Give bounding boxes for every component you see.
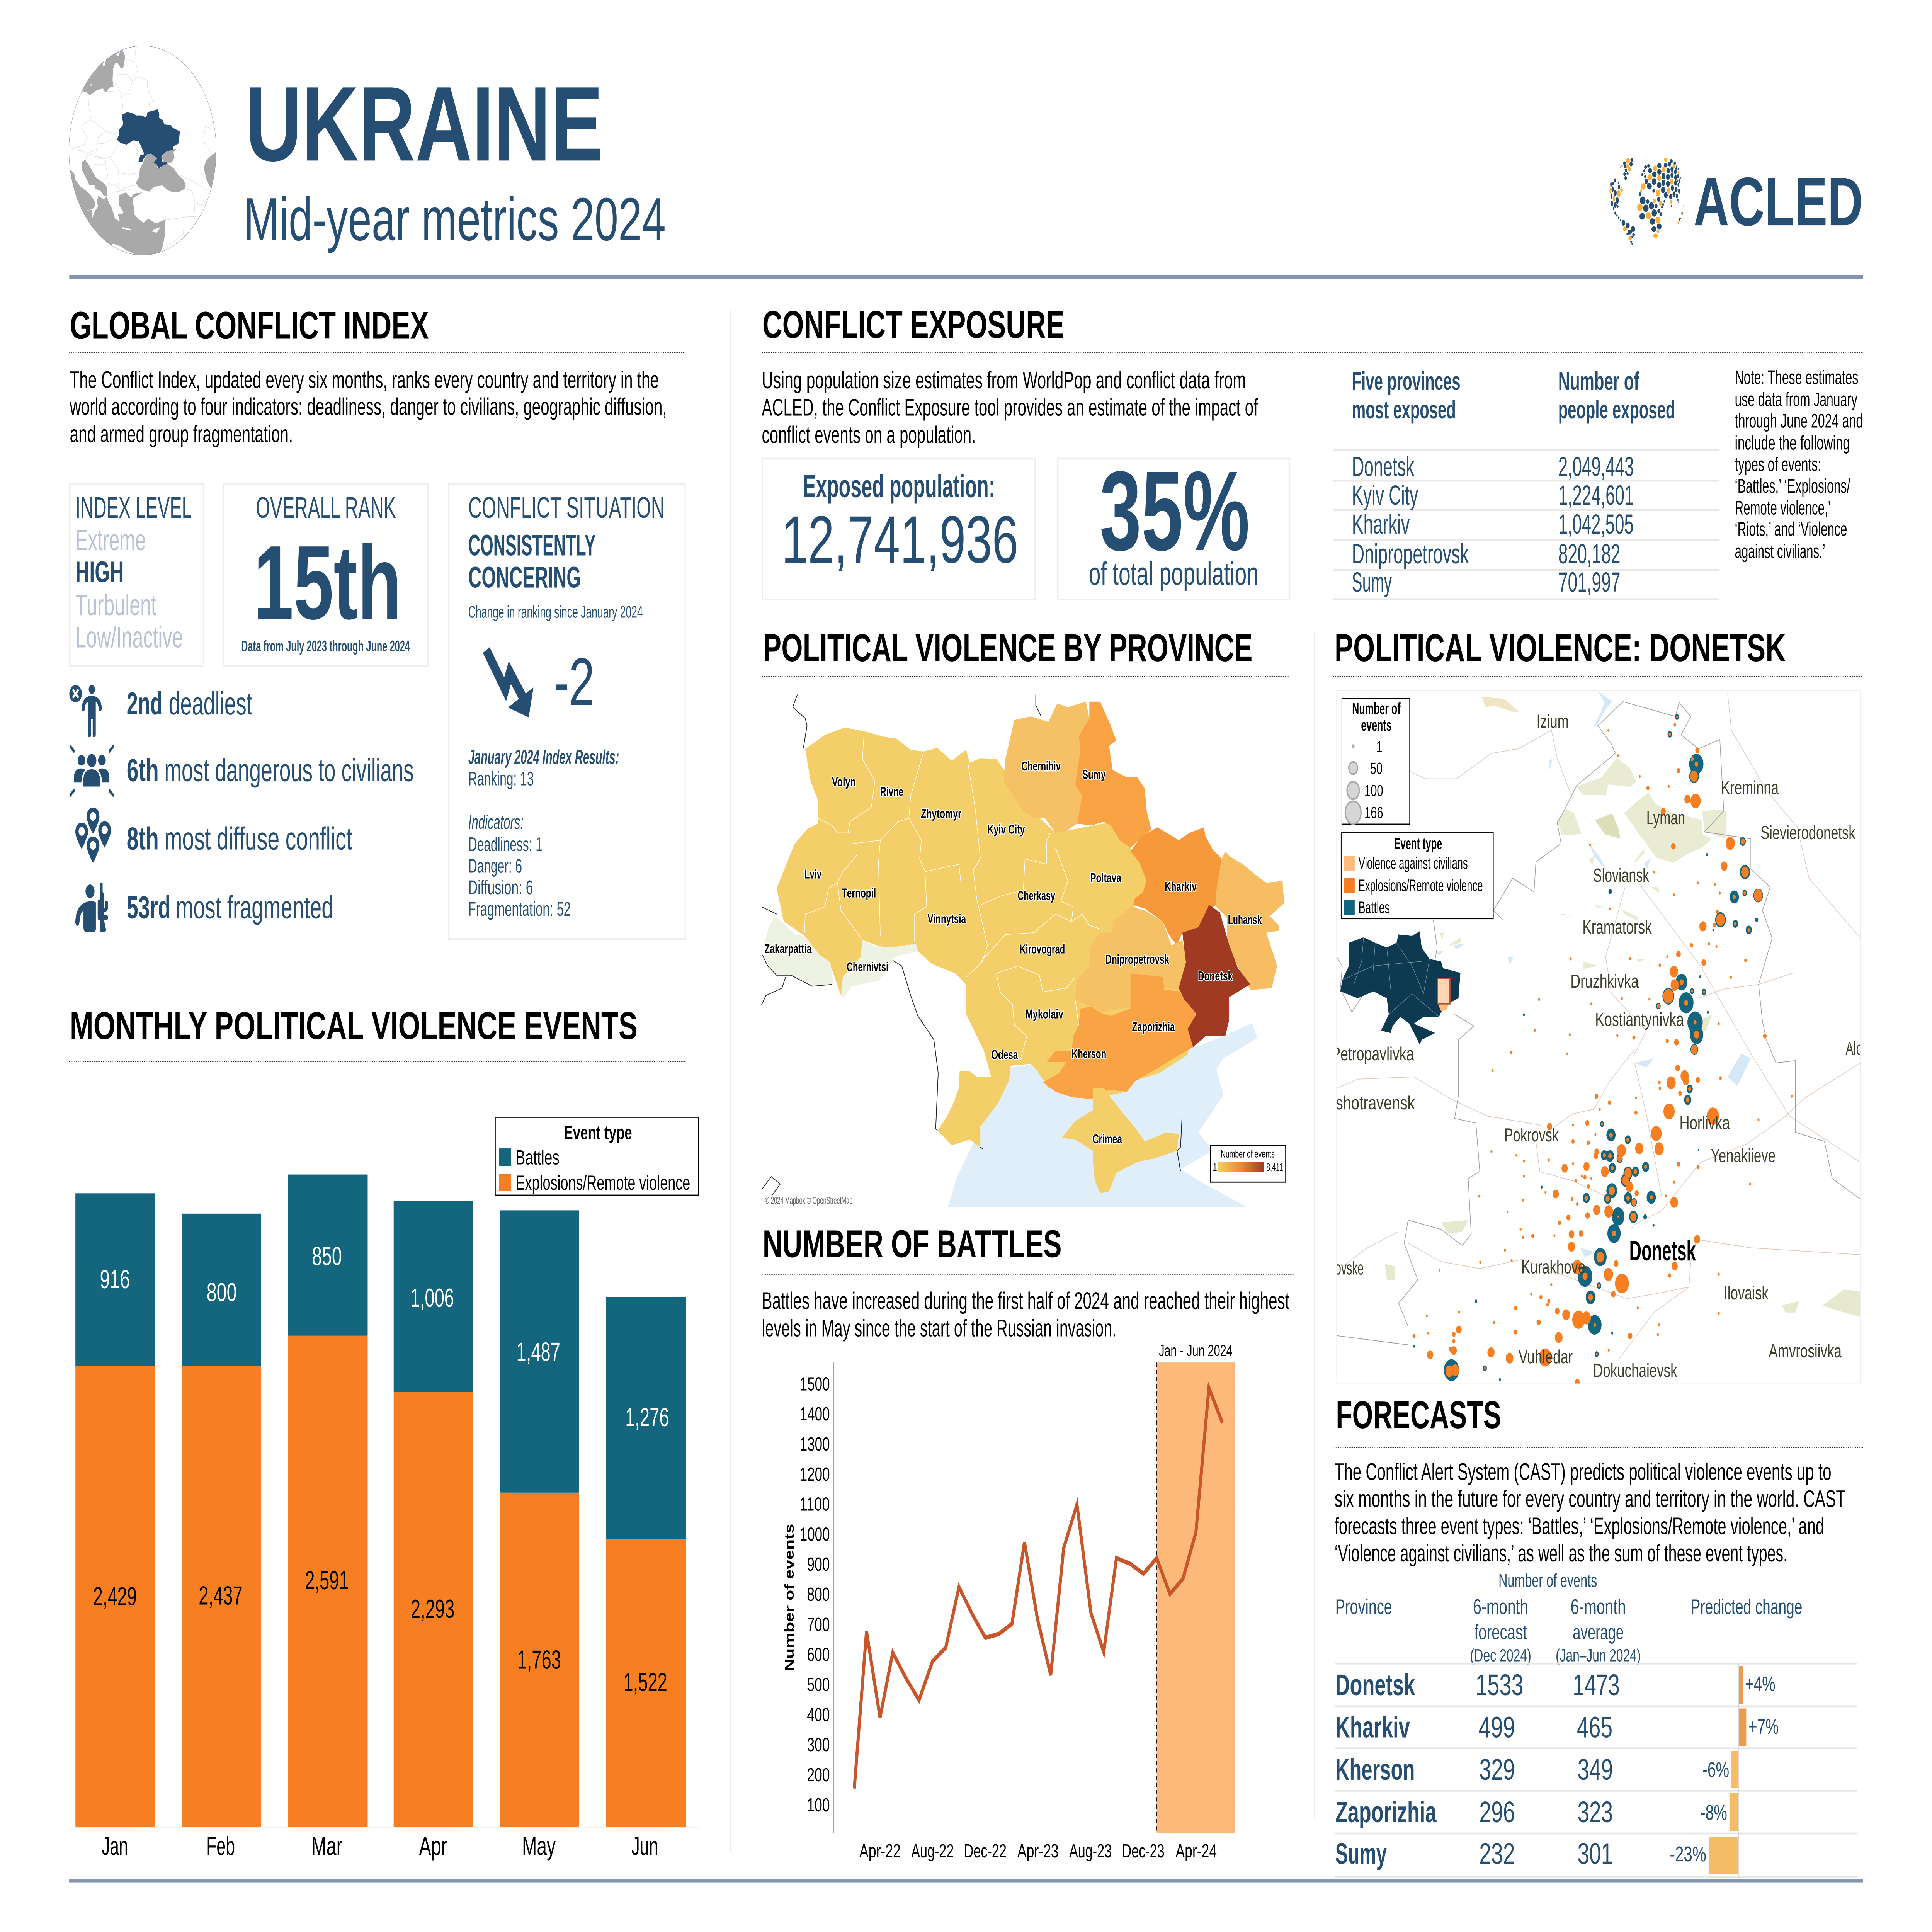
city labels: Kurakhove [1521,1257,1585,1277]
card: conflict situation: Indicators: [468,811,524,833]
province labels: Zakarpattia [764,942,812,956]
province labels: Lviv [804,867,822,882]
card: conflict situation: Danger: 6 [468,855,522,877]
legend: number of events: 1 [1376,738,1383,756]
province labels: Kharkiv [1165,880,1197,894]
legend: number of events: 50 [1370,760,1383,777]
event dots [1413,714,1763,1381]
line chart: Jan - Jun 2024 [1159,1342,1233,1360]
stacked bar chart: 1,763 [517,1645,561,1674]
heading: number of battles: NUMBER OF BATTLES [762,1222,1062,1265]
heading: donetsk: POLITICAL VIOLENCE: DONETSK [1335,626,1786,670]
table: forecasts: Sumy [1335,1837,1387,1871]
indicator: deadliest: deadliest [169,686,252,721]
table: forecasts: Zaporizhia [1335,1796,1437,1829]
province labels: Chernihiv [1021,759,1061,774]
table: forecasts: 6-month [1473,1595,1528,1618]
province labels: Odesa [992,1048,1018,1062]
line chart: 600 [807,1644,830,1665]
legend: number of events: events [1361,716,1391,734]
card: share of population [1058,447,1289,600]
indicator: diffuse conflict: most diffuse conflict [164,821,352,857]
table: most exposed provinces: Number of [1558,367,1639,396]
line chart: 500 [807,1674,830,1695]
table: forecasts: 465 [1577,1711,1612,1744]
indicator: diffuse conflict [75,808,352,863]
note: data explanation: use data from January [1735,389,1857,411]
note: data explanation: include the following [1735,432,1850,454]
line chart: Apr-22 [859,1840,901,1861]
line chart: Aug-22 [911,1840,954,1861]
province labels: Zhytomyr [921,807,961,821]
stacked bar chart: 2,429 [93,1582,137,1611]
line chart [782,1342,1253,1861]
stacked bar chart: Mar [311,1832,342,1861]
city labels: Lyman [1646,807,1685,828]
panel: monthly political violence events [69,1004,699,1861]
icon: person [69,685,102,737]
card: index level [70,484,204,665]
card: index level: HIGH [75,556,124,589]
card: exposed population: 12,741,936 [782,502,1019,577]
stacked bar chart [69,1175,699,1861]
province labels: Poltava [1090,871,1121,885]
table: forecasts: (Dec 2024) [1470,1646,1531,1665]
city labels: Ilovaisk [1724,1282,1769,1303]
table: forecasts: 1473 [1573,1669,1620,1702]
legend: map scale: 8,411 [1266,1162,1283,1173]
legend: event type [495,1117,699,1195]
legend: event type: Explosions/Remote violence [1359,876,1483,895]
bar chart: predicted change: -6% [1702,1758,1729,1781]
text block: exposure description: ACLED, the Conflict Exposure tool provides an estimate of the impact of [762,395,1258,421]
table: most exposed provinces: Kyiv City [1352,480,1418,511]
note: data explanation: ‘Riots,’ and ‘Violence [1735,519,1847,540]
text block: index description: and armed group fragmentation. [70,421,293,448]
text block: exposure description: Using population size estimates from WorldPop and conflict data from [762,367,1246,394]
line chart: 300 [807,1734,830,1755]
note: data explanation: types of events: [1735,454,1821,475]
table: forecasts: 232 [1479,1837,1515,1871]
table: most exposed provinces: Donetsk [1352,451,1414,482]
line chart: 1000 [800,1524,830,1545]
indicator: fragmented [75,883,333,932]
header [69,45,1863,279]
table: most exposed provinces: people exposed [1558,396,1675,424]
card: conflict situation: Deadliness: 1 [468,833,543,855]
logo text: ACLED [1694,163,1863,240]
legend: map scale: 1 [1213,1162,1217,1173]
legend: number of events: 166 [1364,804,1383,821]
indicator: dangerous to civilians [70,747,414,795]
table: forecasts: Kharkiv [1335,1711,1410,1744]
card: conflict situation: Change in ranking since January 2024 [468,602,643,621]
table: forecasts: 323 [1577,1796,1613,1829]
table: forecasts: 349 [1577,1753,1613,1787]
city labels [1313,711,1869,1381]
stacked bar chart: 2,591 [305,1566,349,1595]
panel: conflict exposure [762,303,1863,600]
stacked bar chart: 1,276 [625,1403,669,1432]
province labels: Sumy [1082,768,1106,782]
indicator: deadliest [69,685,252,737]
line chart: 1100 [800,1494,830,1515]
heading: conflict exposure: CONFLICT EXPOSURE [762,303,1065,347]
city labels: ovske [1335,1257,1364,1279]
city labels: Yenakiieve [1711,1145,1776,1166]
heading: monthly events: MONTHLY POLITICAL VIOLENCE EVENTS [70,1004,638,1048]
province labels: Kherson [1071,1047,1106,1061]
province labels: Cherkasy [1018,889,1055,903]
legend: number of events [1342,699,1410,824]
title: UKRAINE [245,65,603,183]
line chart: Dec-22 [964,1840,1007,1861]
stacked bar chart: Jan [102,1832,128,1861]
icon: crowd [70,747,113,795]
card: conflict situation: CONFLICT SITUATION [468,492,665,524]
legend: event type [1341,833,1493,919]
subtitle: Mid-year metrics 2024 [243,185,666,253]
table: most exposed provinces [1333,367,1719,599]
table: most exposed provinces: 701,997 [1558,567,1621,598]
line chart: 1500 [800,1373,830,1395]
bar chart: predicted change: +7% [1748,1714,1779,1738]
stacked bar chart: 1,522 [623,1668,667,1697]
city labels: Kreminna [1721,777,1779,798]
city labels: Pokrovsk [1504,1124,1559,1146]
city labels: Sievierodonetsk [1760,822,1855,843]
indicator: dangerous to civilians: 6th [127,752,159,788]
line chart: 400 [807,1704,830,1725]
card: share of population: 35% [1100,447,1250,574]
card: conflict situation: CONCERING [468,561,581,594]
heading: global conflict index: GLOBAL CONFLICT INDEX [70,304,429,347]
stacked bar chart: 800 [207,1278,237,1307]
card: conflict situation: CONSISTENTLY [468,529,596,562]
bar chart: predicted change [1670,1666,1779,1874]
table: most exposed provinces: Sumy [1352,567,1392,598]
table: forecasts: 6-month [1571,1595,1626,1618]
card: conflict situation: Ranking: 13 [468,768,534,790]
text block: index description: world according to four indicators: deadliness, danger to civilians, geographic diffusion, [70,394,667,420]
text block: forecast description: ‘Violence against civilians,’ as well as the sum of these event types. [1335,1541,1787,1567]
line chart: 1300 [800,1434,830,1454]
province labels: Crimea [1092,1132,1122,1146]
province labels: Mykolaiv [1026,1007,1063,1022]
choropleth map: © 2024 Mapbox © OpenStreetMap [765,1194,852,1206]
table: forecasts: 296 [1479,1796,1515,1829]
indicator: deadliest: 2nd [127,686,163,721]
stacked bar chart: Apr [419,1832,447,1861]
table: most exposed provinces: 1,042,505 [1558,509,1634,540]
card: overall rank: Data from July 2023 through June 2024 [241,638,410,655]
card: conflict situation: Fragmentation: 52 [468,898,571,920]
card: conflict situation: January 2024 Index Results: [468,746,619,768]
icon: armed fighter [75,883,108,932]
card: overall rank: OVERALL RANK [256,492,396,524]
legend: event type: Event type [1394,835,1442,853]
table: forecasts: Number of events [1498,1570,1597,1591]
stacked bar chart: 916 [100,1265,130,1294]
card: conflict situation: -2 [554,644,595,719]
legend: map scale [1210,1146,1286,1182]
panel: number of battles [762,1222,1294,1861]
text block: battles description [762,1288,1289,1342]
province labels: Kyiv City [987,822,1025,837]
icon: down arrow [486,650,533,718]
bar chart: predicted change: +4% [1745,1672,1775,1696]
province labels: Volyn [832,775,856,789]
stacked bar chart: Jun [631,1832,658,1861]
table: most exposed provinces: Five provinces [1352,367,1461,396]
province labels: Rivne [880,785,903,799]
text block: index description [70,367,667,448]
city labels: Sloviansk [1593,865,1650,886]
indicator: diffuse conflict: 8th [127,821,159,857]
city labels: Dokuchaievsk [1593,1360,1677,1381]
table: forecasts: average [1573,1620,1624,1644]
legend: event type: Battles [516,1146,560,1169]
line chart: Number of events [782,1524,796,1672]
line chart: Apr-24 [1175,1840,1217,1861]
stacked bar chart: 1,006 [410,1284,454,1313]
line chart: 800 [807,1584,830,1605]
choropleth map [762,695,1284,1207]
icon: map pins [75,808,111,863]
text block: battles description: Battles have increased during the first half of 2024 and reached their highest [762,1288,1289,1314]
legend: map scale: Number of events [1221,1148,1275,1160]
card: overall rank: 15th [253,524,401,641]
table: forecasts: 301 [1577,1837,1613,1871]
province labels: Luhansk [1228,913,1262,927]
card: exposed population [762,459,1035,600]
city labels: Amvrosiivka [1769,1340,1842,1361]
panel: political violence by province [762,626,1290,1207]
stacked bar chart: 850 [312,1242,342,1271]
card: overall rank [224,484,428,665]
bar chart: predicted change: -8% [1701,1801,1727,1824]
icon: globe locator map [69,45,218,257]
logo: ACLED [1609,158,1863,245]
note: data explanation: ‘Battles,’ ‘Explosions/ [1735,475,1850,497]
table: forecasts: 1533 [1475,1669,1524,1702]
table: most exposed provinces: 1,224,601 [1558,480,1634,511]
line chart: 100 [807,1794,830,1815]
stacked bar chart: 1,487 [517,1337,560,1367]
note: data explanation: against civilians.’ [1735,541,1825,562]
card: exposed population: Exposed population: [803,468,995,504]
indicator: fragmented: 53rd [127,890,171,925]
note: data explanation: Remote violence,’ [1735,497,1831,519]
card: index level: Turbulent [75,589,156,622]
table: forecasts: 499 [1479,1711,1515,1744]
province labels: Zaporizhia [1132,1020,1175,1034]
city labels: Druzhkivka [1570,971,1639,992]
table: most exposed provinces: Dnipropetrovsk [1352,539,1469,570]
table: forecasts [1335,1570,1857,1878]
card: conflict situation: Diffusion: 6 [468,877,533,898]
stacked bar chart: 2,293 [411,1595,454,1624]
city labels: Vuhledar [1519,1346,1573,1367]
icon: ACLED dotted world [1609,158,1684,245]
city labels: Donetsk [1629,1235,1696,1267]
panel: global conflict index [69,304,685,939]
legend: number of events: 100 [1364,782,1383,799]
legend: event type: Explosions/Remote violence [516,1172,690,1194]
table: forecasts: 329 [1479,1753,1515,1787]
province labels: Vinnytsia [927,912,966,926]
table: forecasts: Province [1335,1595,1392,1618]
stacked bar chart: Feb [206,1832,235,1861]
card: index level: Extreme [75,524,146,557]
text block: forecast description [1335,1459,1845,1567]
table: most exposed provinces: 820,182 [1558,539,1621,570]
indicator: fragmented: most fragmented [176,890,333,925]
stacked bar chart: 2,437 [199,1581,243,1610]
event map [1313,691,1869,1385]
province labels [764,759,1262,1146]
text block: index description: The Conflict Index, updated every six months, ranks every country and territory in the [70,367,659,393]
text block: battles description: levels in May since the start of the Russian invasion. [762,1315,1116,1342]
panel: forecasts [1335,1393,1863,1878]
legend: event type: Battles [1359,898,1390,917]
province labels: Kirovograd [1020,942,1065,957]
line chart: Apr-23 [1017,1840,1059,1861]
note: data explanation [1735,367,1863,562]
legend: event type: Event type [564,1122,632,1144]
province labels: Dnipropetrovsk [1105,952,1169,967]
text block: forecast description: forecasts three event types: ‘Battles,’ ‘Explosions/Remote violence,’ and [1335,1513,1824,1539]
city labels: Pershotravensk [1313,1092,1415,1113]
table: forecasts: Donetsk [1335,1669,1415,1702]
note: data explanation: through June 2024 and [1735,410,1863,432]
table: most exposed provinces: most exposed [1352,396,1456,424]
text block: forecast description: six months in the future for every country and territory in the world. CAST [1335,1486,1845,1512]
table: most exposed provinces: 2,049,443 [1558,451,1634,482]
line chart: 200 [807,1764,830,1785]
city labels: Horlivka [1680,1112,1730,1133]
province labels: Ternopil [842,886,876,900]
line chart: Dec-23 [1122,1840,1165,1861]
table: forecasts: Predicted change [1691,1595,1802,1618]
stacked bar chart: May [522,1832,556,1861]
line chart: 1400 [800,1403,830,1425]
heading: forecasts: FORECASTS [1336,1393,1501,1437]
indicator: dangerous to civilians: most dangerous to civilians [164,752,414,788]
table: forecasts: forecast [1474,1620,1527,1644]
city labels: Izium [1537,711,1569,732]
panel: political violence donetsk [1313,626,1869,1385]
card: conflict situation [449,484,685,939]
province labels: Donetsk [1198,969,1233,983]
note: data explanation: Note: These estimates [1735,367,1858,388]
province labels: Chernivtsi [847,960,888,975]
card: share of population: of total population [1088,556,1259,592]
text block: forecast description: The Conflict Alert System (CAST) predicts political violence events up to [1335,1459,1832,1485]
line chart: 700 [807,1614,830,1635]
table: most exposed provinces: Kharkiv [1352,509,1410,540]
city labels: Kramatorsk [1582,917,1652,937]
table: forecasts: (Jan–Jun 2024) [1556,1646,1641,1665]
bar chart: predicted change: -23% [1670,1842,1706,1866]
text block: exposure description [762,367,1258,449]
heading: by province: POLITICAL VIOLENCE BY PROVINCE [763,626,1252,670]
line chart: 900 [807,1554,830,1575]
city labels: Petropavlivka [1331,1043,1414,1065]
text block: exposure description: conflict events on a population. [762,422,976,449]
card: index level: INDEX LEVEL [75,492,192,524]
card: index level: Low/Inactive [75,621,183,654]
legend: number of events: Number of [1352,700,1401,718]
table: forecasts: Kherson [1335,1753,1415,1787]
legend: event type: Violence against civilians [1359,854,1468,872]
city labels: Kostiantynivka [1595,1009,1684,1030]
line chart: Aug-23 [1069,1840,1112,1861]
city labels: Alch [1845,1038,1869,1059]
line chart: 1200 [800,1464,830,1485]
